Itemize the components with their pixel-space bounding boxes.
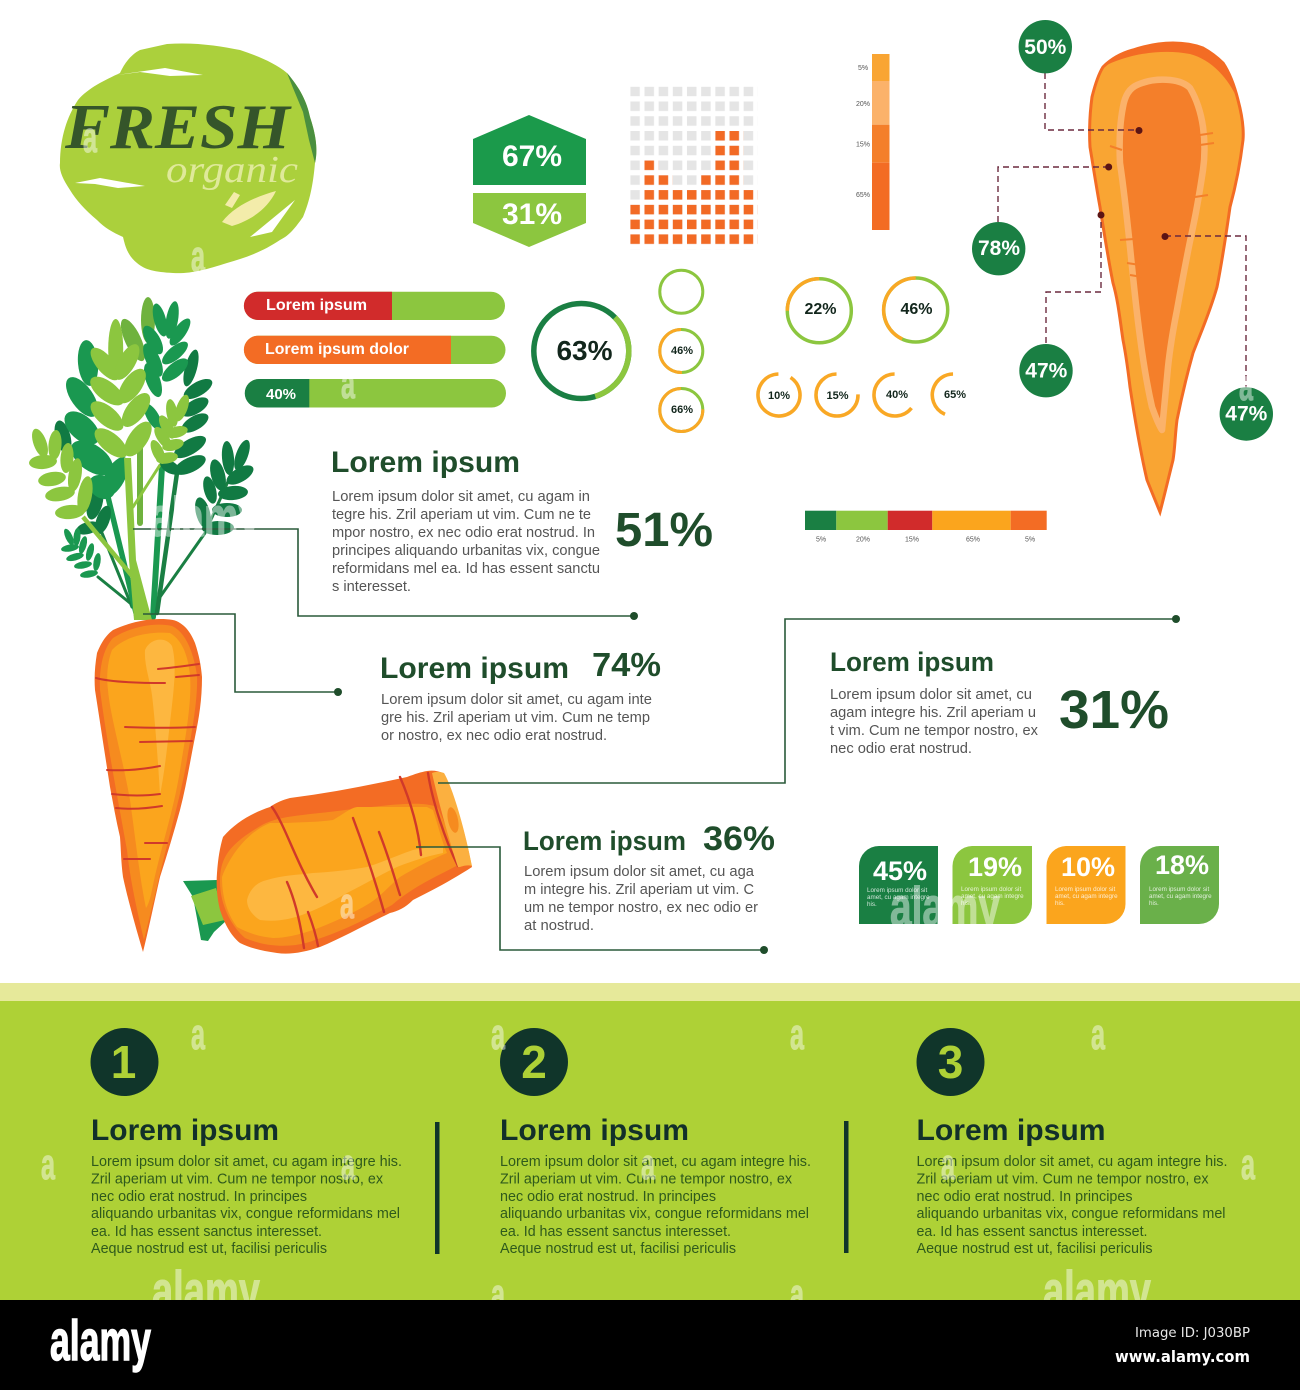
watermarks: a <box>790 1270 804 1319</box>
step 1: 1 <box>111 1036 136 1088</box>
card 19%: amet, cu agam integre <box>961 893 1024 900</box>
progress bars: 40% <box>266 386 296 403</box>
watermarks: a <box>41 1140 55 1189</box>
step 3: 3 <box>938 1036 963 1088</box>
step 3: aliquando urbanitas vix, congue reformidans mel <box>916 1206 1226 1222</box>
open arc gauges: 40% <box>886 389 908 401</box>
open arc gauges: 15% <box>826 390 849 402</box>
text block: 36% <box>523 820 775 934</box>
hexagon stat: 67% and 31%: 67% <box>502 140 562 173</box>
card 18%: Lorem ipsum dolor sit <box>1149 886 1209 893</box>
text block: 31% <box>830 647 1169 757</box>
right carrot cross-section <box>1090 43 1243 512</box>
card 10%: Lorem ipsum dolor sit <box>1055 886 1115 893</box>
carrot foliage <box>28 297 256 620</box>
horizontal stacked bar: 65% <box>966 536 980 544</box>
footer bar <box>0 1300 1300 1390</box>
vertical stacked bar: 20% <box>856 101 870 108</box>
card 10%: amet, cu agam integre <box>1055 893 1118 900</box>
text block: 31%: Lorem ipsum <box>830 647 994 677</box>
open arc gauges <box>750 365 981 425</box>
text block: 36%: m integre his. Zril aperiam ut vim. C <box>524 882 754 898</box>
step dividers <box>435 1121 848 1254</box>
carrot callouts: dashed leaders and percentage circles: 47% <box>1025 360 1068 382</box>
step 2: Zril aperiam ut vim. Cum ne tempor nostro, ex <box>500 1172 792 1188</box>
card 19%: 19% <box>968 852 1022 882</box>
donut 63%: 63% <box>556 335 613 366</box>
horizontal stacked bar: 15% <box>905 536 919 544</box>
footer bar: alamy <box>50 1309 151 1373</box>
card 18% <box>1140 846 1219 924</box>
footer bar: Image ID: J030BP <box>1135 1325 1250 1341</box>
small donuts column <box>660 270 703 432</box>
card 10%: his. <box>1055 900 1065 907</box>
carrot callouts: dashed leaders and percentage circles: 78% <box>978 237 1020 260</box>
text block: 74%: gre his. Zril aperiam ut vim. Cum ne temp <box>381 710 650 726</box>
vertical stacked bar: 5% <box>858 65 868 72</box>
horizontal stacked bar: 5% <box>816 536 826 544</box>
step 1: Lorem ipsum <box>91 1114 279 1147</box>
carrot callouts: dashed leaders and percentage circles: 50% <box>1024 36 1067 59</box>
text block: 31%: agam integre his. Zril aperiam u <box>830 705 1036 721</box>
open arc gauges: 10% <box>768 390 790 402</box>
step 3: Aeque nostrud est ut, facilisi periculis <box>916 1241 1152 1257</box>
watermarks: a <box>341 1140 355 1189</box>
step 2: aliquando urbanitas vix, congue reformidans mel <box>500 1206 809 1222</box>
text block: 36%: 36% <box>703 820 775 858</box>
watermarks: a <box>641 1140 655 1189</box>
text block: 36%: um ne tempor nostro, ex nec odio er <box>524 900 758 916</box>
step 3: nec odio erat nostrud. In principes <box>916 1189 1132 1205</box>
card 45%: amet, cu agam integre <box>867 894 930 901</box>
text block: 74%: Lorem ipsum dolor sit amet, cu agam inte <box>381 692 652 708</box>
step 1: ea. Id has essent sanctus interesset. <box>91 1224 322 1240</box>
card 19%: Lorem ipsum dolor sit <box>961 886 1021 893</box>
sliced carrot <box>183 771 472 954</box>
text block: 51%: reformidans mel ea. Id has essent sanctu <box>332 561 600 577</box>
text block: 31%: Lorem ipsum dolor sit amet, cu <box>830 687 1032 703</box>
horizontal stacked bar <box>805 511 1047 544</box>
watermarks: alamy <box>1043 1259 1151 1322</box>
stat cards <box>859 846 1219 924</box>
watermarks: a <box>340 879 354 928</box>
progress bars <box>244 292 506 408</box>
card 10%: 10% <box>1061 852 1115 882</box>
hexagon stat: 67% and 31% <box>473 115 586 247</box>
watermarks: a <box>1241 1140 1255 1189</box>
watermarks: a <box>83 113 97 162</box>
step 3: Zril aperiam ut vim. Cum ne tempor nostro, ex <box>916 1172 1208 1188</box>
small donuts column: 46% <box>671 345 693 357</box>
step 2: Aeque nostrud est ut, facilisi periculis <box>500 1241 736 1257</box>
step 3: ea. Id has essent sanctus interesset. <box>916 1224 1148 1240</box>
step 1 <box>90 1028 402 1257</box>
text block: 51%: Lorem ipsum <box>331 446 520 479</box>
card 45%: Lorem ipsum dolor sit <box>867 887 927 894</box>
progress bars: Lorem ipsum dolor <box>265 341 409 358</box>
medium donuts: 22% and 46% <box>787 267 958 353</box>
medium donuts: 22% and 46%: 46% <box>900 301 933 318</box>
watermarks: a <box>191 1010 205 1059</box>
text block: 36%: Lorem ipsum <box>523 826 686 856</box>
vertical stacked bar: 65% <box>856 192 870 199</box>
text block: 74%: 74% <box>592 646 661 683</box>
medium donuts: 22% and 46%: 22% <box>804 301 837 318</box>
card 18%: amet, cu agam integre <box>1149 893 1212 900</box>
step 1: Lorem ipsum dolor sit amet, cu agam integre his. <box>91 1154 402 1170</box>
step 2: ea. Id has essent sanctus interesset. <box>500 1224 731 1240</box>
bottom band background <box>0 983 1300 1300</box>
horizontal stacked bar: 5% <box>1025 536 1035 544</box>
watermarks: a <box>1239 361 1253 410</box>
card 18%: his. <box>1149 900 1159 907</box>
logo: fresh organic badge: FRESH <box>64 91 292 162</box>
footer bar: www.alamy.com <box>1115 1347 1250 1366</box>
watermarks: a <box>491 1270 505 1319</box>
watermarks: alamy <box>150 485 260 548</box>
watermarks: alamy <box>890 875 1000 938</box>
text block: 36%: at nostrud. <box>524 918 594 934</box>
text block: 31%: 31% <box>1059 680 1169 740</box>
progress bars: Lorem ipsum <box>266 297 367 314</box>
card 45%: his. <box>867 901 877 908</box>
text block: 51%: Lorem ipsum dolor sit amet, cu agam in <box>332 489 590 505</box>
text block: 74%: Lorem ipsum <box>380 652 569 685</box>
step 3: Lorem ipsum dolor sit amet, cu agam integre his. <box>916 1154 1228 1170</box>
text block: 51%: 51% <box>615 504 713 557</box>
step 1: nec odio erat nostrud. In principes <box>91 1189 307 1205</box>
text block: 51%: principes aliquando urbanitas vix, congue <box>332 543 600 559</box>
waffle column chart <box>630 87 758 249</box>
step 1: Aeque nostrud est ut, facilisi periculis <box>91 1241 327 1257</box>
open arc gauges: 65% <box>944 389 966 401</box>
watermarks: a <box>790 1010 804 1059</box>
watermarks: a <box>191 232 205 281</box>
carrot callouts: dashed leaders and percentage circles: 47% <box>1225 402 1268 426</box>
whole carrot <box>95 619 202 952</box>
step 2: 2 <box>521 1036 547 1088</box>
vertical stacked bar: 15% <box>856 142 870 148</box>
text block: 51%: mpor nostro, ex nec odio erat nostrud. In <box>332 525 595 541</box>
text block: 36%: Lorem ipsum dolor sit amet, cu aga <box>524 864 754 880</box>
watermarks: alamy <box>152 1259 260 1322</box>
text block: 51%: tegre his. Zril aperiam ut vim. Cum ne te <box>332 507 591 523</box>
card 45% <box>859 846 938 924</box>
text block: 51%: s interesset. <box>332 579 411 595</box>
watermarks: a <box>491 1010 505 1059</box>
card 19% <box>952 846 1032 924</box>
donut 63% <box>514 284 648 418</box>
step 1: aliquando urbanitas vix, congue reformidans mel <box>91 1206 400 1222</box>
card 45%: 45% <box>873 856 927 886</box>
step 2 <box>500 1028 811 1257</box>
text block: 74%: or nostro, ex nec odio erat nostrud. <box>381 728 607 744</box>
card 19%: his. <box>961 900 971 907</box>
step 2: Lorem ipsum dolor sit amet, cu agam integre his. <box>500 1154 811 1170</box>
watermarks: a <box>341 359 355 408</box>
step 2: nec odio erat nostrud. In principes <box>500 1189 716 1205</box>
logo: fresh organic badge: organic <box>166 149 298 191</box>
vertical stacked bar <box>856 54 890 230</box>
small donuts column: 66% <box>671 404 693 416</box>
text block: 31%: t vim. Cum ne tempor nostro, ex <box>830 723 1038 739</box>
hexagon stat: 67% and 31%: 31% <box>502 198 562 231</box>
card 18%: 18% <box>1155 850 1209 880</box>
leader lines <box>133 529 1180 954</box>
logo: fresh organic badge <box>60 43 316 273</box>
step 3 <box>916 1028 1228 1257</box>
card 10% <box>1046 846 1126 924</box>
watermarks: a <box>1091 1010 1105 1059</box>
step 3: Lorem ipsum <box>916 1114 1106 1147</box>
carrot callouts: dashed leaders and percentage circles <box>972 20 1273 441</box>
step 2: Lorem ipsum <box>500 1114 689 1147</box>
text block: 74% <box>380 646 661 744</box>
horizontal stacked bar: 20% <box>856 536 870 544</box>
text block: 31%: nec odio erat nostrud. <box>830 741 972 757</box>
step 1: Zril aperiam ut vim. Cum ne tempor nostro, ex <box>91 1172 383 1188</box>
watermarks: a <box>941 1140 955 1189</box>
text block: 51% <box>331 446 713 595</box>
